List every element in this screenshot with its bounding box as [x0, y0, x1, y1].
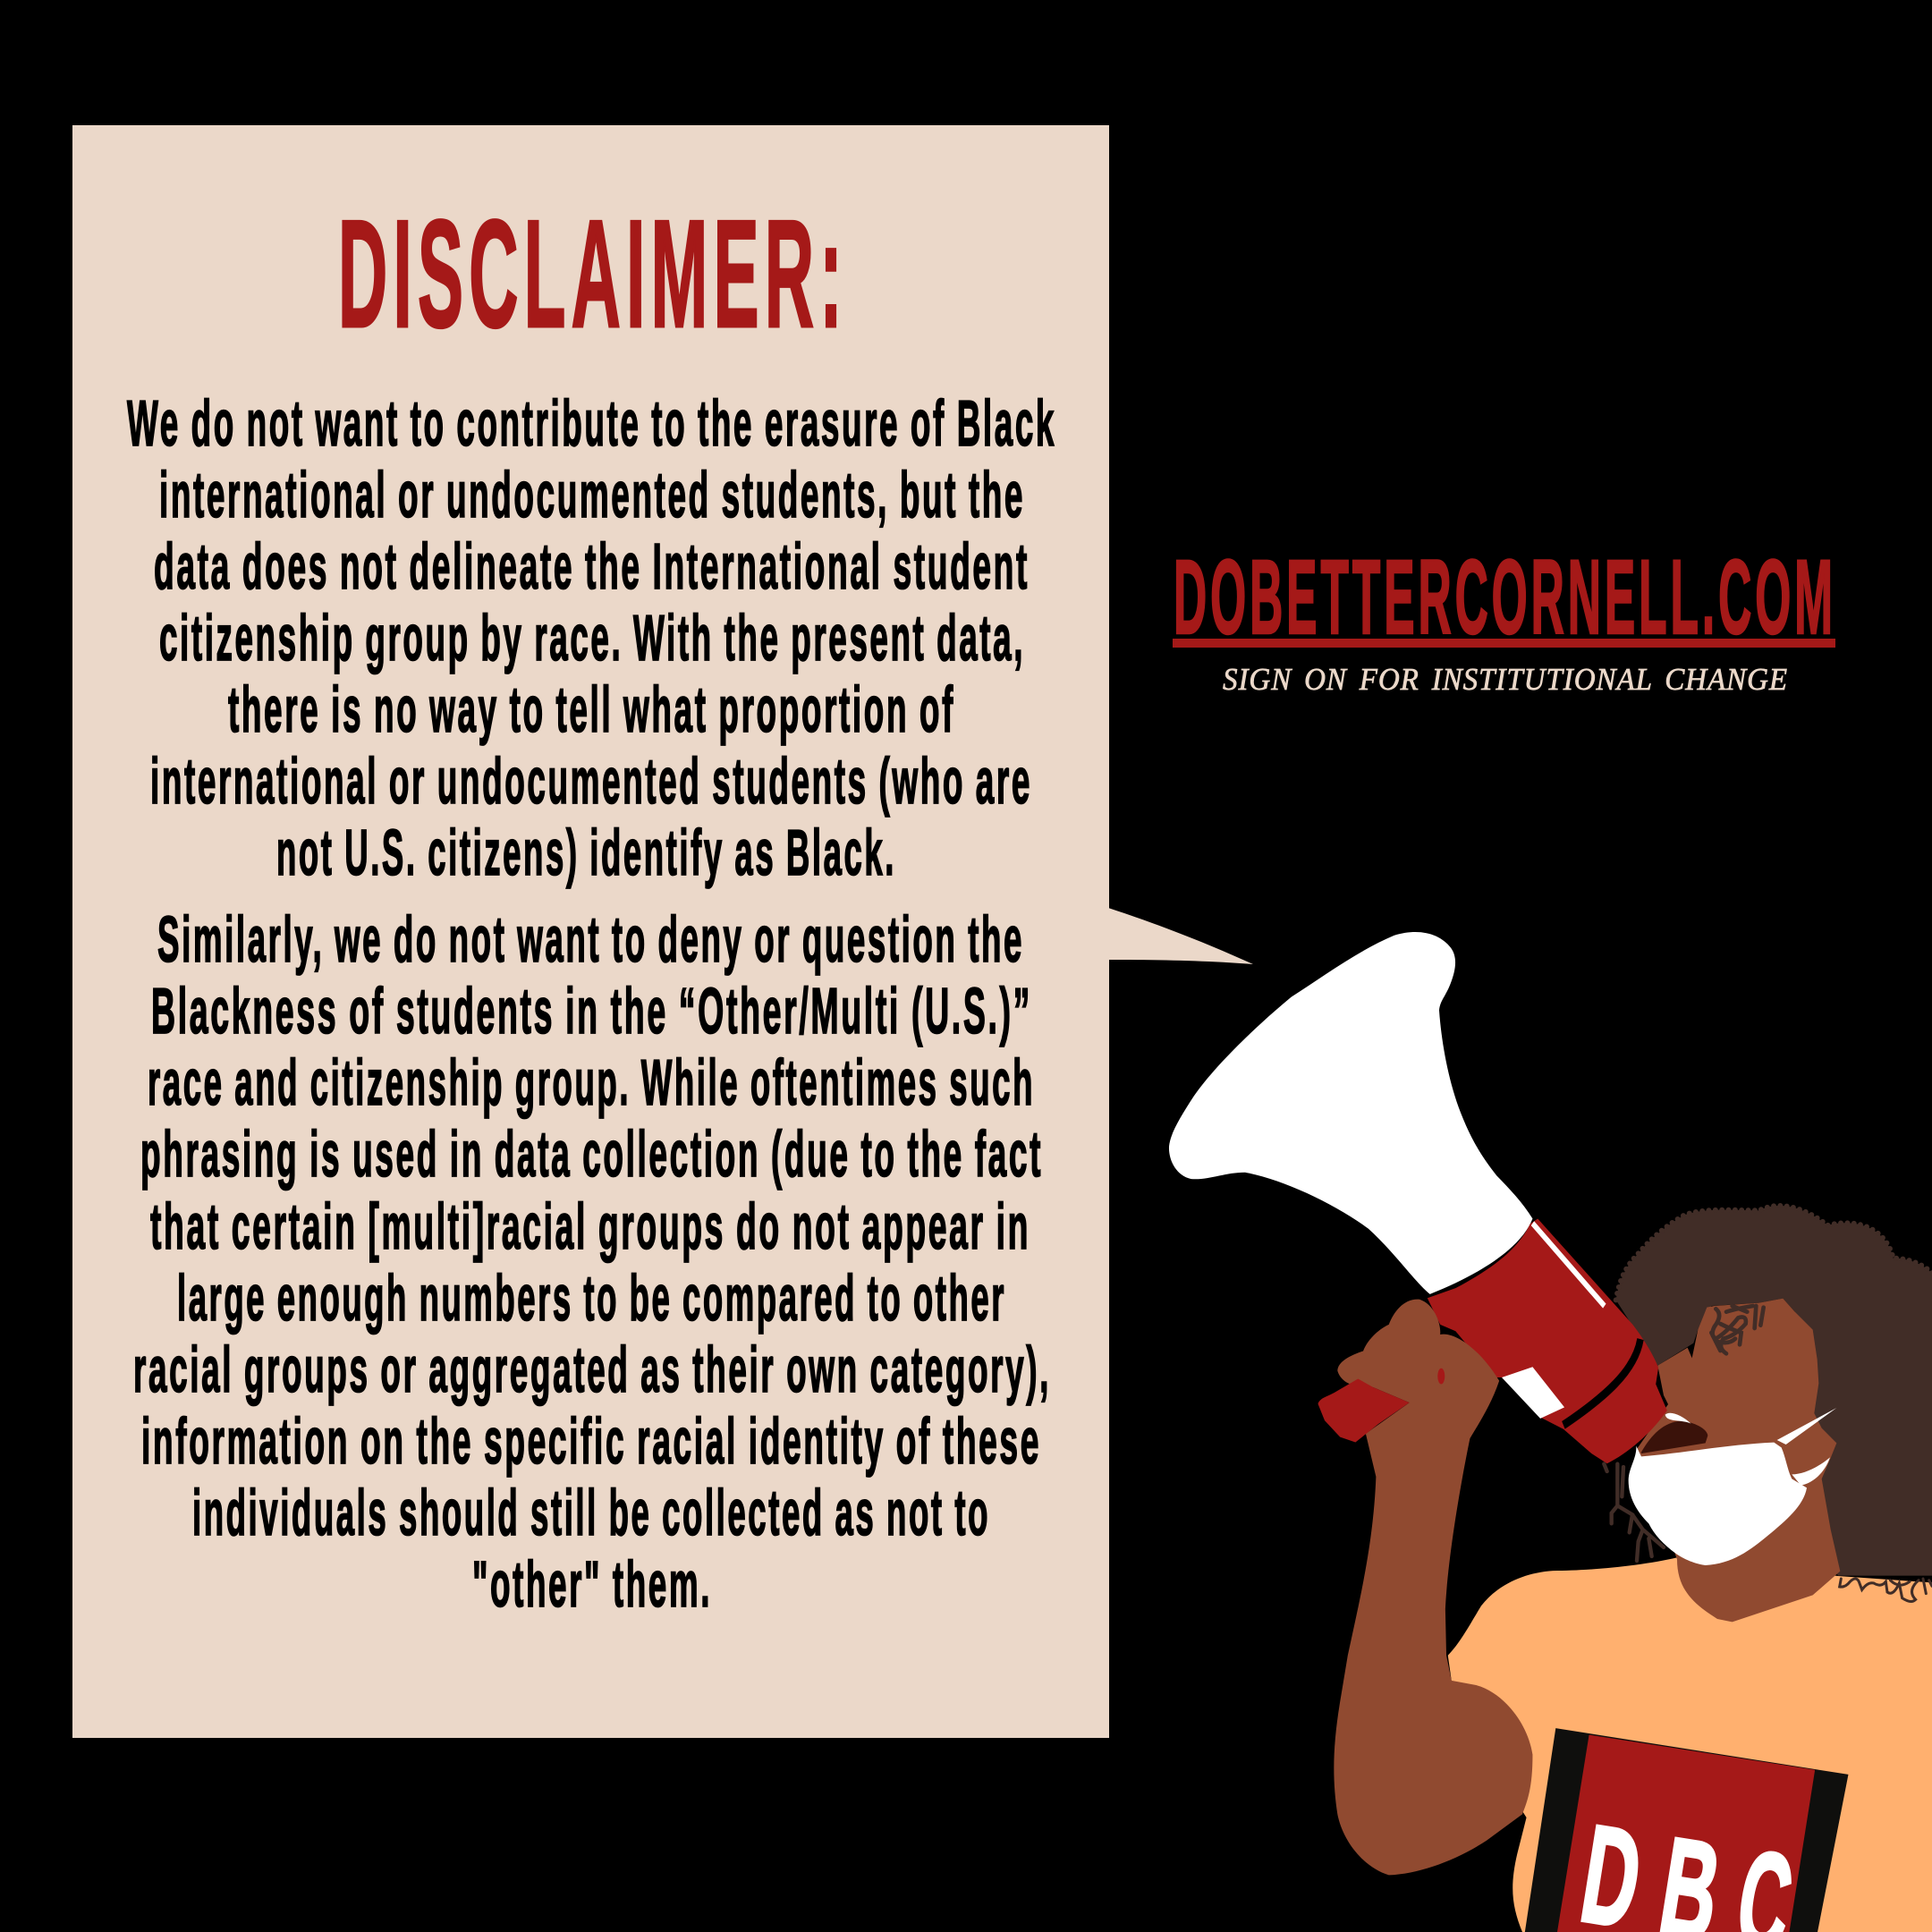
text block: first paragraph: international or undocumented students (who are [150, 746, 1032, 818]
text block: second paragraph: information on the specific racial identity of these [141, 1406, 1041, 1478]
text block: first paragraph: there is no way to tell what proportion of [228, 674, 955, 746]
text block: second paragraph: "other" them. [472, 1549, 712, 1621]
head and hair [1604, 1206, 1932, 1622]
hair curls at neck [1840, 1579, 1932, 1601]
text block: second paragraph: Similarly, we do not want to deny or question the [157, 904, 1024, 976]
handle trigger [1437, 1368, 1445, 1384]
text block: first paragraph [127, 388, 1056, 889]
t-shirt [1448, 1557, 1932, 1932]
hair [1616, 1206, 1932, 1576]
text block: second paragraph [133, 904, 1051, 1621]
text block: second paragraph: that certain [multi]racial groups do not appear in [150, 1191, 1030, 1263]
speech bubble tail [1108, 908, 1253, 964]
text block: first paragraph: We do not want to contribute to the erasure of Black [127, 388, 1056, 460]
shirt logo black backing [1525, 1728, 1848, 1932]
tagline: SIGN ON FOR INSTITUTIONAL CHANGE [1223, 662, 1788, 697]
megaphone horn [1169, 932, 1532, 1294]
teeth [1665, 1413, 1691, 1424]
megaphone black band [1563, 1339, 1640, 1425]
panel: disclaimer speech bubble: DISCLAIMER: [338, 189, 848, 360]
face and neck [1637, 1299, 1840, 1622]
text block: second paragraph: race and citizenship group. While oftentimes such [148, 1047, 1035, 1119]
url underline [1173, 639, 1835, 648]
text block: second paragraph: individuals should still be collected as not to [192, 1478, 990, 1549]
hair curl edge [1616, 1206, 1932, 1300]
text block: second paragraph: phrasing is used in data collection (due to the fact [140, 1119, 1043, 1191]
megaphone white button [1502, 1367, 1564, 1419]
text block: first paragraph: not U.S. citizens) identify as Black. [276, 818, 896, 889]
face mask [1629, 1408, 1836, 1565]
megaphone handle [1318, 1379, 1410, 1443]
text block: second paragraph: large enough numbers to be compared to other [177, 1263, 1006, 1335]
speech bubble body [72, 125, 1109, 1738]
panel: disclaimer speech bubble [72, 125, 1253, 1738]
text block: first paragraph: international or undocumented students, but the [159, 460, 1025, 531]
website callout [1173, 538, 1836, 697]
hair curls by the cheek [1604, 1464, 1664, 1561]
text block: first paragraph: data does not delineate the International student [154, 531, 1030, 603]
shirt logo red panel [1557, 1735, 1815, 1932]
megaphone body [1428, 1219, 1667, 1463]
open mouth [1641, 1420, 1707, 1453]
shirt logo letters [1572, 1796, 1801, 1932]
megaphone white strip [1532, 1224, 1605, 1306]
arm and fist [1334, 1300, 1532, 1875]
text block: second paragraph: racial groups or aggregated as their own category), [133, 1335, 1051, 1406]
forehead curls [1711, 1306, 1764, 1353]
illustration: protester with megaphone [1169, 932, 1932, 1932]
text block: first paragraph: citizenship group by race. With the present data, [159, 603, 1025, 674]
text block: second paragraph: Blackness of students in the “Other/Multi (U.S.)” [151, 976, 1032, 1047]
